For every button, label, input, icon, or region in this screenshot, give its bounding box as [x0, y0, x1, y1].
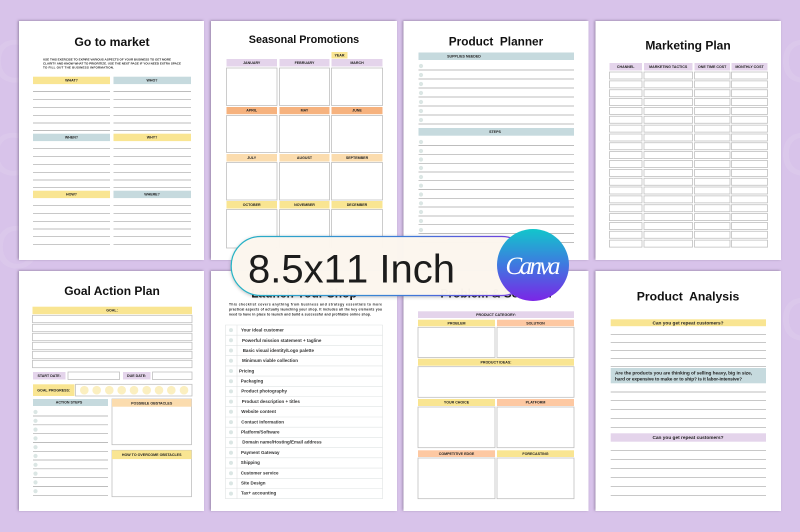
- heading: Marketing Plan: [645, 38, 731, 52]
- supplies band: [418, 52, 574, 60]
- solution block: [497, 320, 574, 358]
- intro text: practical aspects of actually launching your shop. It includes all the key elements you: [229, 308, 382, 312]
- question band 1: Can you get repeat customers?: [652, 320, 724, 326]
- heading: Product Analysis: [637, 289, 739, 303]
- panel: go to market: [19, 21, 204, 260]
- checklist: Minimum viable collection: [242, 358, 298, 363]
- goal band: GOAL:: [106, 309, 118, 313]
- year tag: [332, 52, 348, 58]
- product category band: PRODUCT CATEGORY:: [476, 313, 516, 317]
- heading: Goal Action Plan: [64, 284, 160, 298]
- panel: seasonal promotions: [211, 21, 397, 260]
- canva badge: [497, 229, 569, 301]
- dates: DUE DATE:: [127, 374, 146, 378]
- possible obstacles: POSSIBLE OBSTACLES: [131, 401, 173, 405]
- goal boxes: [32, 315, 192, 368]
- checklist: Pricing: [239, 368, 255, 373]
- panel: product planner: [404, 21, 588, 260]
- checklist: Shipping: [241, 460, 260, 465]
- panel: launch your shop: [211, 271, 397, 511]
- intro text: USE THIS EXERCISE TO EXPIRE VARIOUS ASPECTS OF YOUR BUSINESS TO GET MORE: [43, 58, 171, 62]
- question band 1: [611, 319, 766, 326]
- forecasting block: [497, 450, 574, 499]
- possible obstacles: [112, 399, 192, 445]
- checklist: Platform/Software: [241, 430, 280, 434]
- section bands: [33, 77, 191, 198]
- month headers: SEPTEMBER: [346, 156, 369, 160]
- checklist: Packaging: [241, 378, 263, 384]
- problem block: [418, 320, 495, 358]
- action steps: ACTION STEPS: [56, 401, 83, 405]
- checklist: Basic visual identity/Logo palette: [243, 348, 314, 353]
- heading: Product Planner: [449, 34, 544, 48]
- dates: [33, 372, 192, 380]
- heading: Go to market: [74, 35, 150, 49]
- question band 2: Are the products you are thinking of selling heavy, big in size,: [615, 370, 752, 376]
- month headers: JULY: [247, 156, 257, 160]
- your choice block: YOUR CHOICE: [444, 401, 470, 405]
- writing lines: [33, 92, 191, 244]
- panel: goal action plan: [19, 271, 204, 511]
- background watermark: [0, 28, 800, 353]
- how to overcome obstacles: HOW TO OVERCOME OBSTACLES: [122, 453, 182, 457]
- canva wordmark: Canva: [506, 253, 560, 280]
- section bands: WHY?: [147, 136, 157, 140]
- goal progress: [33, 384, 192, 396]
- question band 2: [611, 368, 766, 383]
- goal progress: GOAL PROGRESS:: [37, 388, 70, 392]
- product category band: [418, 311, 574, 318]
- month headers: OCTOBER: [243, 203, 261, 207]
- platform block: PLATFORM: [526, 401, 545, 405]
- platform block: [497, 399, 574, 448]
- month headers: FEBRUARY: [295, 61, 315, 65]
- competitive edge block: COMPETITIVE EDGE: [439, 452, 475, 456]
- intro text: [229, 302, 382, 316]
- heading: Launch Your Shop: [251, 286, 357, 300]
- month headers: JANUARY: [243, 61, 261, 65]
- month headers: [226, 59, 382, 208]
- writing lines: [418, 70, 574, 242]
- solution block: SOLUTION: [526, 321, 545, 325]
- month headers: JUNE: [352, 109, 362, 113]
- your choice block: [418, 399, 495, 448]
- writing lines: [611, 334, 766, 495]
- intro text: [43, 58, 181, 70]
- section bands: WHO?: [147, 78, 157, 82]
- product ideas block: PRODUCT IDEAS:: [481, 360, 511, 364]
- month headers: MAY: [301, 109, 309, 113]
- month headers: DECEMBER: [347, 203, 368, 207]
- heading: Problem & Solution: [440, 287, 552, 301]
- table header: [610, 63, 768, 70]
- checklist: Product photography: [241, 389, 288, 394]
- checklist: Site Design: [241, 480, 266, 486]
- checklist: Payment Gateway: [241, 450, 280, 455]
- year tag: YEAR: [334, 54, 345, 58]
- checklist: Your ideal customer: [241, 328, 284, 333]
- checklist: Domain name/Hosting/Email address: [242, 440, 322, 445]
- month headers: NOVEMBER: [294, 203, 315, 207]
- table header: MARKETING TACTICS: [649, 65, 688, 69]
- section bands: HOW?: [66, 192, 77, 196]
- product ideas block: [418, 359, 574, 397]
- month boxes: [226, 68, 382, 248]
- intro text: This checklist covers anything from business and strategy essentials to more: [229, 302, 382, 306]
- problem block: PROBLEM: [448, 321, 465, 325]
- checklist: Powerful mission statement + tagline: [242, 338, 322, 343]
- table cells: [610, 72, 768, 247]
- panel: marketing plan: [596, 21, 781, 260]
- how to overcome obstacles: [112, 450, 192, 497]
- intro text: need to have in place to launch and build a successful and profitable online shop.: [229, 312, 371, 316]
- intro text: CLARITY AND KNOW WHAT TO PRIORITIZE. USE THE NEXT PAGE IF YOU NEED EXTRA SPACE: [43, 62, 181, 66]
- table header: MONTHLY COST: [735, 65, 764, 69]
- action steps: [33, 399, 108, 495]
- panel: product analysis: [596, 271, 781, 511]
- checklist: Website content: [241, 409, 276, 414]
- size label: 8.5x11 Inch: [248, 248, 455, 292]
- checklist: Contact information: [241, 419, 284, 424]
- question band 2: hard or expensive to make or to ship? Is it labor-intensive?: [615, 377, 742, 383]
- checklist: Customer service: [241, 470, 279, 475]
- checklist: Tax+ accounting: [241, 491, 277, 496]
- checklist: Product description + titles: [242, 399, 300, 404]
- steps band: STEPS: [489, 130, 501, 134]
- heading: Seasonal Promotions: [249, 34, 359, 46]
- month headers: APRIL: [246, 109, 258, 113]
- table header: CHANNEL: [617, 65, 635, 69]
- intro text: TO FILL OUT THE BUSINESS INFORMATION.: [43, 66, 114, 70]
- question band 3: Can you get repeat customers?: [652, 435, 724, 441]
- goal band: [32, 307, 192, 314]
- supplies band: SUPPLIES NEEDED: [447, 54, 481, 58]
- question band 3: [611, 433, 766, 442]
- section bands: WHEN?: [65, 136, 78, 140]
- month headers: MARCH: [350, 61, 364, 65]
- panel: problem and solution: [404, 271, 588, 511]
- section bands: WHAT?: [65, 78, 78, 82]
- steps band: [418, 128, 574, 136]
- dates: START DATE:: [37, 374, 61, 378]
- table header: ONE TIME COST: [698, 65, 727, 69]
- checklist circles: [419, 64, 423, 232]
- checklist: [226, 325, 382, 499]
- section bands: WHERE?: [144, 192, 160, 196]
- size pill: [231, 236, 531, 296]
- competitive edge block: [418, 450, 495, 499]
- forecasting block: FORECASTING: [522, 452, 549, 456]
- month headers: AUGUST: [297, 156, 313, 160]
